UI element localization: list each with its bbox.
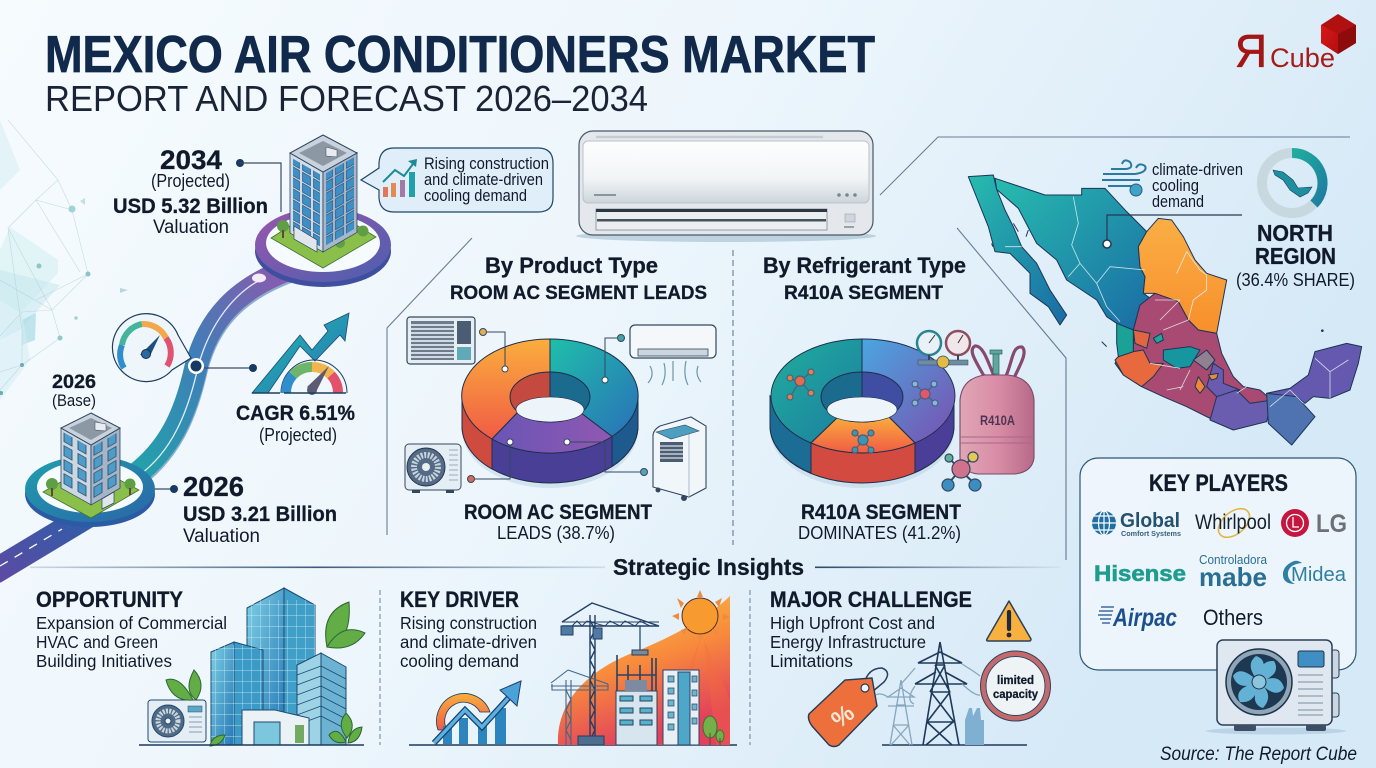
map: Mexico regions bbox=[968, 175, 1362, 445]
CAGR text bbox=[236, 402, 355, 445]
heading: by product type: By Product Type bbox=[485, 253, 658, 278]
logo: Airpac: Airpac bbox=[1112, 604, 1177, 632]
2034 valuation text: Valuation bbox=[153, 217, 229, 238]
icon: refrigerant molecule bbox=[942, 452, 981, 491]
map text: climate-driven: climate-driven bbox=[1152, 160, 1243, 179]
logo: Whirlpool bbox=[1195, 503, 1271, 543]
insight: opportunity: Building Initiatives bbox=[36, 651, 172, 671]
logo: RCube: Cube bbox=[1270, 43, 1335, 73]
panel: key players bbox=[1080, 458, 1356, 670]
road timeline bbox=[0, 208, 391, 572]
logo: LG: LG bbox=[1316, 510, 1347, 538]
icon: outdoor unit bbox=[405, 444, 461, 493]
insight: major challenge bbox=[770, 587, 972, 671]
divider bbox=[732, 250, 734, 545]
2034 valuation text: USD 5.32 Billion bbox=[113, 195, 268, 218]
icon: limited capacity badge bbox=[980, 651, 1050, 721]
insight: opportunity: HVAC and Green bbox=[36, 632, 158, 652]
heading: key players: KEY PLAYERS bbox=[1149, 470, 1288, 497]
2026 base label: (Base) bbox=[52, 391, 96, 410]
text: others: Others bbox=[1203, 605, 1263, 630]
icon: leaves bbox=[166, 602, 365, 746]
logo: Global: Comfort Systems bbox=[1121, 529, 1181, 538]
callout: rising construction: Rising construction bbox=[424, 154, 549, 173]
icon: R410A cylinder: R410A bbox=[980, 412, 1015, 428]
icon: price tag: % bbox=[826, 699, 860, 734]
ground lines bbox=[139, 744, 1027, 746]
building: finished bbox=[663, 670, 699, 745]
donut caption: R410A: R410A SEGMENT bbox=[801, 501, 961, 524]
donut caption: room AC: ROOM AC SEGMENT bbox=[464, 501, 652, 524]
insight: major challenge: MAJOR CHALLENGE bbox=[770, 587, 972, 612]
map text: climate-driven: cooling bbox=[1152, 176, 1199, 195]
icon: window AC bbox=[407, 317, 475, 364]
2026 valuation text bbox=[155, 471, 337, 547]
insight: opportunity bbox=[36, 587, 227, 671]
icon: 2026 building bbox=[43, 413, 139, 518]
icon: construction and sun bbox=[551, 590, 730, 745]
2026 valuation text: 2026 bbox=[183, 471, 244, 502]
icon: share ring bbox=[1262, 153, 1323, 213]
callout: rising construction: and climate-driven bbox=[424, 170, 543, 189]
2026 valuation text: Valuation bbox=[183, 526, 260, 547]
chart: product type donut bbox=[462, 339, 638, 488]
logo: Hisense: Hisense bbox=[1094, 561, 1186, 586]
title: REPORT AND FORECAST 2026–2034 bbox=[45, 78, 648, 119]
insight: key driver: Rising construction bbox=[400, 613, 537, 633]
icon: limited capacity badge: limited bbox=[997, 673, 1034, 687]
icon: outdoor condenser unit bbox=[1206, 640, 1346, 734]
icon: wall air conditioner bbox=[576, 131, 876, 242]
CAGR connector bbox=[204, 364, 257, 372]
ring: 2034 bbox=[255, 208, 391, 287]
icon: speed gauge bubble bbox=[112, 314, 191, 382]
icon: split AC bbox=[630, 325, 716, 385]
insight: key driver: KEY DRIVER bbox=[400, 587, 519, 612]
logo: RCube: Я bbox=[1235, 25, 1267, 77]
2034 valuation text: 2034 bbox=[160, 145, 222, 175]
logo: Global: Global bbox=[1120, 510, 1180, 532]
crane: main bbox=[561, 603, 659, 745]
map text: climate-driven bbox=[1152, 160, 1243, 211]
CAGR text: CAGR 6.51% bbox=[236, 402, 355, 425]
source: Source: The Report Cube bbox=[1160, 744, 1357, 765]
heading: by refrigerant type: By Refrigerant Type bbox=[763, 253, 966, 278]
map text: climate-driven: demand bbox=[1152, 192, 1204, 211]
crane: small bbox=[551, 670, 608, 745]
icon: green commercial buildings bbox=[148, 588, 346, 745]
logo: Midea: Midea bbox=[1291, 564, 1347, 586]
donut caption: room AC: LEADS (38.7%) bbox=[497, 523, 615, 543]
icon: wind bbox=[1102, 160, 1146, 196]
2026 base label: 2026 bbox=[52, 371, 96, 393]
map callout: leader bbox=[1103, 215, 1242, 248]
icon: 2034 building bbox=[271, 135, 376, 268]
icon: factory bbox=[965, 708, 984, 745]
insight: opportunity: Expansion of Commercial bbox=[36, 613, 227, 633]
decorative polygon mesh bbox=[0, 120, 128, 400]
heading: by product type bbox=[450, 253, 707, 304]
logo: mabe: mabe bbox=[1199, 562, 1267, 592]
heading: by refrigerant type bbox=[763, 253, 966, 304]
insight: major challenge: Energy Infrastructure bbox=[770, 632, 926, 652]
north region text bbox=[1236, 220, 1355, 290]
north region text: NORTH bbox=[1257, 220, 1333, 246]
icon: R410A cylinder bbox=[960, 346, 1034, 474]
insight: key driver bbox=[400, 587, 537, 671]
logo: Whirlpool: Whirlpool bbox=[1195, 511, 1271, 534]
icon: price tag bbox=[808, 668, 888, 746]
icon: donut molecules bbox=[787, 369, 938, 453]
dividers bbox=[380, 590, 750, 745]
title: MEXICO AIR CONDITIONERS MARKET bbox=[45, 26, 875, 84]
icon: portable AC bbox=[653, 417, 706, 501]
heading: by product type: ROOM AC SEGMENT LEADS bbox=[450, 283, 707, 304]
icon: growth chart with gauge bbox=[434, 681, 521, 744]
ring: 2026 bbox=[25, 456, 155, 527]
building: under construction bbox=[616, 655, 657, 745]
donut caption: R410A bbox=[798, 501, 961, 543]
icon: growth arrow with gauge bbox=[252, 313, 349, 395]
insight: key driver: cooling demand bbox=[400, 651, 519, 671]
logo: LG bbox=[1281, 509, 1347, 538]
title bbox=[45, 26, 875, 119]
2034 valuation text bbox=[113, 145, 281, 238]
chart: refrigerant donut bbox=[770, 339, 955, 488]
icon: warning triangle bbox=[987, 601, 1031, 641]
icon: limited capacity badge: capacity bbox=[993, 687, 1038, 701]
icon: manifold gauges bbox=[917, 331, 970, 368]
icon: transmission towers bbox=[876, 642, 980, 745]
center panel frame bbox=[387, 137, 1350, 560]
2026 base label bbox=[52, 371, 96, 410]
donut caption: R410A: DOMINATES (41.2%) bbox=[798, 523, 961, 543]
2026 valuation text: USD 3.21 Billion bbox=[183, 503, 337, 526]
2034 valuation text: (Projected) bbox=[151, 171, 230, 191]
north region text: (36.4% SHARE) bbox=[1236, 270, 1355, 290]
heading: by refrigerant type: R410A SEGMENT bbox=[784, 283, 943, 304]
callout: rising construction bbox=[361, 148, 553, 212]
donut caption: room AC bbox=[464, 501, 652, 543]
heading: strategic insights: Strategic Insights bbox=[613, 554, 804, 580]
insight: major challenge: Limitations bbox=[770, 651, 853, 671]
insight: major challenge: High Upfront Cost and bbox=[770, 613, 935, 633]
CAGR text: (Projected) bbox=[259, 425, 337, 445]
leader lines: product donut bbox=[468, 328, 648, 482]
logo: Global bbox=[1092, 510, 1181, 538]
logo: RCube bbox=[1235, 14, 1356, 77]
logo: mabe: Controladora bbox=[1199, 552, 1268, 567]
insight: opportunity: OPPORTUNITY bbox=[36, 587, 183, 612]
logo: Airpac bbox=[1098, 604, 1177, 632]
callout: rising construction: cooling demand bbox=[424, 186, 527, 205]
north region text: REGION bbox=[1255, 243, 1336, 269]
insight: key driver: and climate-driven bbox=[400, 632, 537, 652]
